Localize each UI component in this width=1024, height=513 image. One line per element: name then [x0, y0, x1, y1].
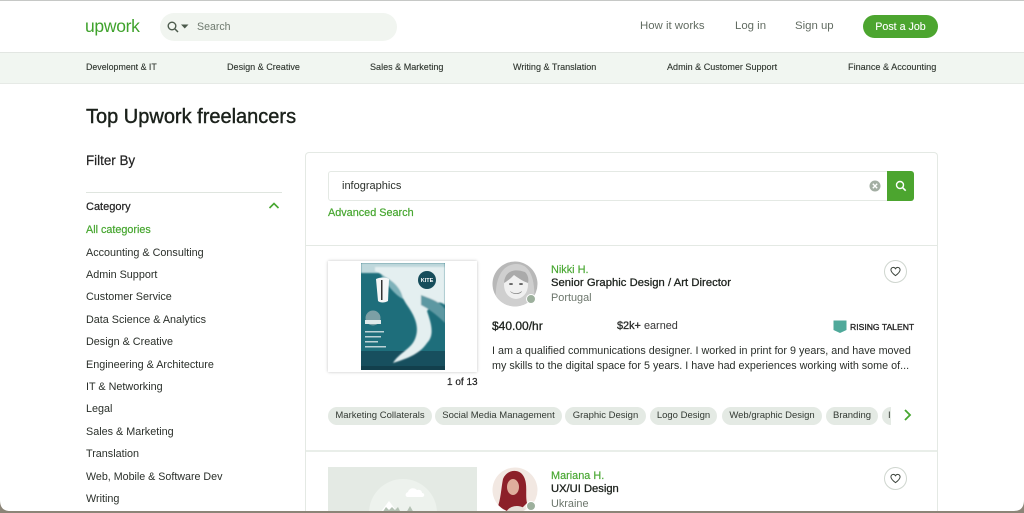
link: how it works: How it works: [640, 20, 705, 32]
magazine masthead: KITE: [421, 278, 434, 284]
category list: Writing: [86, 493, 119, 505]
category heading: Category: [86, 201, 131, 213]
skill tags: Social Media Management: [442, 410, 555, 421]
freelancer name: Nikki H.: [551, 264, 589, 276]
category list: Customer Service: [86, 291, 172, 303]
divider: [306, 245, 937, 246]
nav items: Admin & Customer Support: [667, 62, 777, 72]
search query: infographics: [342, 180, 401, 192]
skill tags: I: [888, 410, 891, 421]
avatar: [492, 262, 538, 306]
bio: my skills to the digital space for 5 years. I have had experiences working with some of...: [492, 360, 909, 372]
bio: [492, 345, 911, 372]
skill tags: [328, 407, 891, 425]
nav items: [86, 62, 936, 72]
category list: All categories: [86, 224, 151, 236]
search placeholder: Search: [197, 21, 231, 33]
freelancer name: Mariana H.: [551, 470, 604, 482]
nav items: Design & Creative: [227, 62, 300, 72]
magazine cover: [361, 263, 445, 370]
portfolio thumbnail: [328, 261, 477, 372]
category list: Accounting & Consulting: [86, 247, 204, 259]
job title: UX/UI Design: [551, 483, 619, 495]
bio: I am a qualified communications designer. I worked in print for 9 years, and have moved: [492, 345, 911, 357]
earnings: $2k+ earned: [617, 320, 678, 332]
status dot: [526, 294, 536, 304]
hourly rate: $40.00/hr: [492, 319, 543, 333]
category list: IT & Networking: [86, 381, 163, 393]
logo: upwork: [85, 16, 140, 36]
icon: heart: [890, 474, 901, 484]
card: Nikki H.: [306, 246, 937, 452]
icon: heart: [890, 266, 901, 276]
card: Mariana H.: [328, 467, 907, 511]
advanced search link: Advanced Search: [328, 207, 414, 219]
icon: magnifier: [896, 180, 906, 192]
skill tags: Marketing Collaterals: [335, 410, 425, 421]
nav items: Development & IT: [86, 62, 157, 72]
country: Portugal: [551, 292, 592, 304]
link: log in: Log in: [735, 20, 766, 32]
skill tags: Web/graphic Design: [729, 410, 815, 421]
filter heading: Filter By: [86, 153, 135, 168]
favorite button: [884, 260, 907, 283]
country: Ukraine: [551, 498, 589, 510]
badge label: RISING TALENT: [850, 322, 914, 332]
skill tags: Graphic Design: [573, 410, 638, 421]
category list: Data Science & Analytics: [86, 314, 206, 326]
category list: Sales & Marketing: [86, 426, 174, 438]
avatar: [492, 468, 538, 511]
category list: Design & Creative: [86, 336, 173, 348]
skill tags: Logo Design: [657, 410, 710, 421]
favorite button: [884, 467, 907, 490]
category list: Translation: [86, 448, 139, 460]
sidebar: category: [86, 192, 282, 513]
nav items: Writing & Translation: [513, 62, 596, 72]
window bottom edge: [0, 500, 1024, 513]
category list: [86, 224, 222, 505]
link: sign up: Sign up: [795, 20, 834, 32]
category list: Engineering & Architecture: [86, 359, 214, 371]
search box: [160, 13, 397, 41]
nav items: Finance & Accounting: [848, 62, 936, 72]
icon: clear: [870, 180, 880, 192]
panel: results: [305, 152, 938, 513]
search field: [328, 171, 888, 201]
icon: shield: [834, 320, 846, 333]
job title: Senior Graphic Design / Art Director: [551, 277, 731, 289]
gallery count: 1 of 13: [447, 377, 478, 388]
nav items: Sales & Marketing: [370, 62, 443, 72]
button: post a job: [863, 15, 938, 38]
category list: Legal: [86, 403, 112, 415]
skill tags: Branding: [833, 410, 871, 421]
status dot: [526, 501, 536, 511]
category list: Admin Support: [86, 269, 157, 281]
category nav: [0, 52, 1024, 84]
icon: chevron up: [269, 202, 279, 209]
icon: next chevron: [904, 409, 912, 421]
category list: Web, Mobile & Software Dev: [86, 471, 222, 483]
search button: [887, 171, 914, 201]
top bar: [0, 0, 1024, 53]
badge: rising talent: [834, 320, 914, 333]
page title: Top Upwork freelancers: [86, 106, 296, 128]
icon: search: [168, 22, 188, 32]
button: post a job: Post a Job: [875, 21, 926, 33]
placeholder thumbnail: [328, 467, 477, 513]
